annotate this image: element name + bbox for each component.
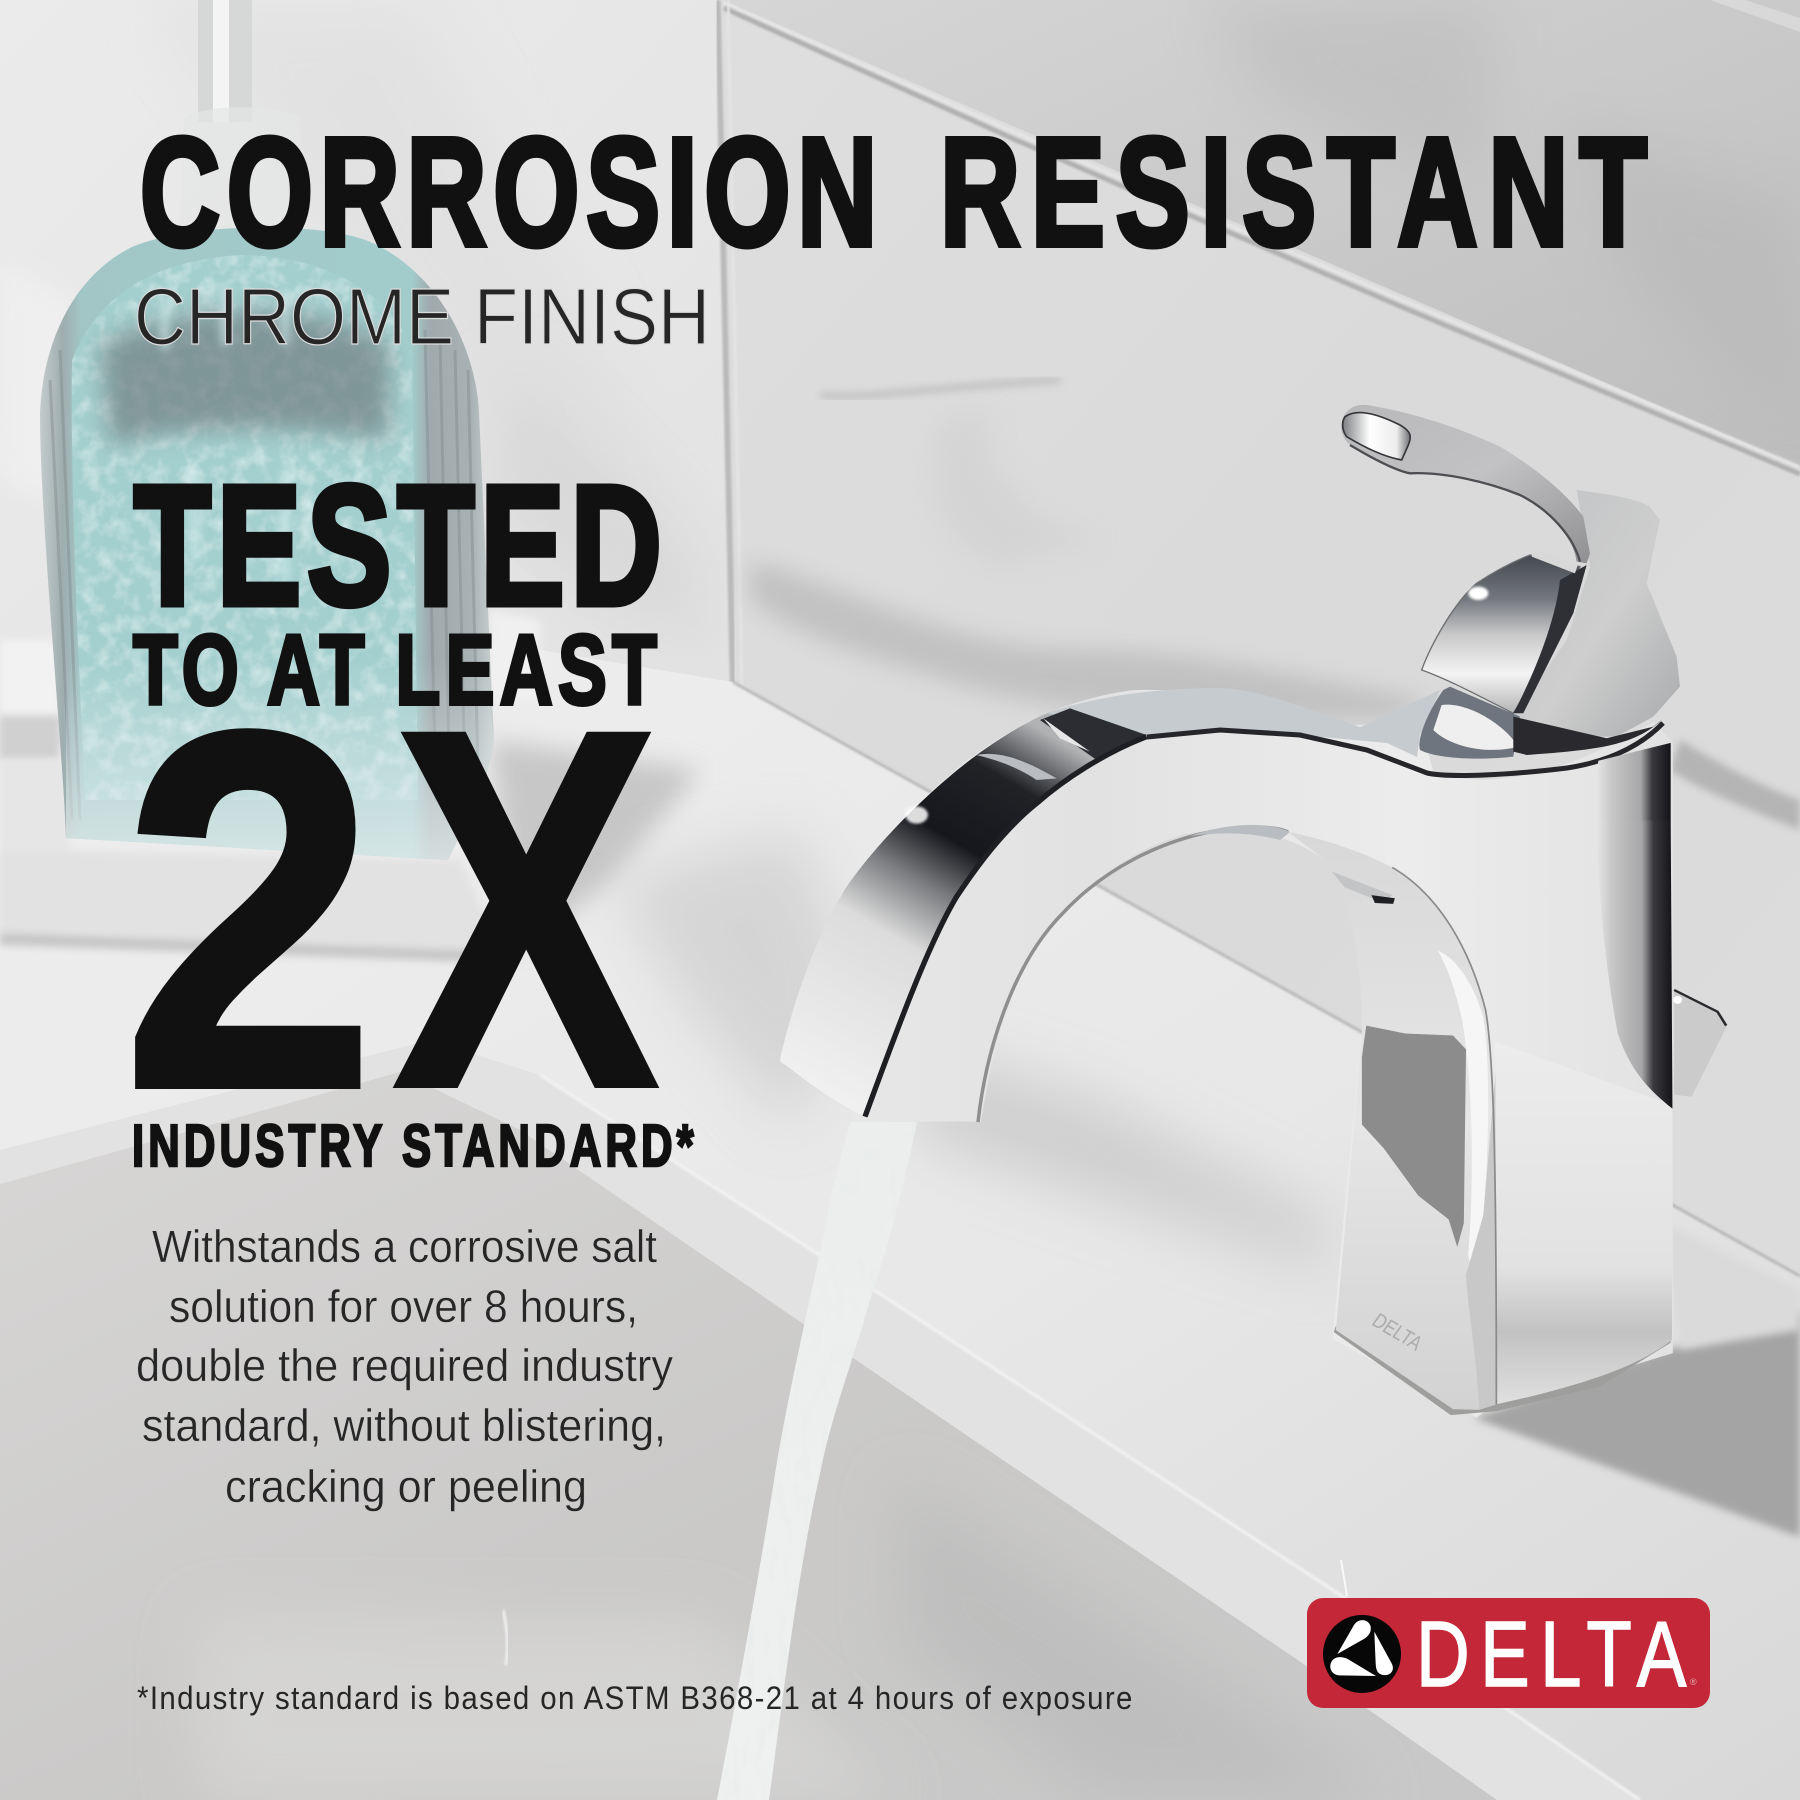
spout reflections bbox=[865, 708, 1147, 1117]
counter glint bbox=[1341, 1560, 1347, 1596]
counter edge band bbox=[0, 1040, 1640, 1800]
title: corrosion resistant: CORROSION bbox=[140, 107, 877, 278]
water stream bbox=[717, 1122, 917, 1800]
lower right block bbox=[1494, 1041, 1672, 1404]
headline: to at least: TO AT LEAST bbox=[133, 615, 657, 726]
soap dispenser bottle bbox=[40, 0, 494, 860]
drain lever bbox=[1674, 990, 1727, 1097]
arch lip bbox=[1190, 825, 1290, 840]
footnote: *Industry standard is based on ASTM B368-21 at 4 hours of exposure bbox=[137, 1680, 1132, 1716]
base trim bbox=[1334, 1326, 1671, 1415]
upper wall tile bbox=[722, 0, 1800, 467]
bottle glass bbox=[40, 227, 494, 860]
sparkle bbox=[1673, 996, 1682, 1004]
registered mark: ® bbox=[1690, 1677, 1697, 1687]
left wall tile bbox=[0, 0, 735, 780]
faucet top edge line bbox=[1147, 723, 1663, 775]
body copy: standard, without blistering, bbox=[142, 1400, 666, 1451]
logo icon: delta emblem bbox=[1323, 1615, 1401, 1693]
spout front facet bbox=[780, 688, 1220, 1117]
leg gray reflection bbox=[1362, 1026, 1466, 1247]
counter shadows bbox=[490, 740, 700, 950]
subtitle: chrome finish: CHROME FINISH bbox=[134, 272, 710, 361]
faucet leg and lower body bbox=[1288, 743, 1727, 1415]
box and tray behind bottle bbox=[0, 640, 60, 716]
marble veins bbox=[750, 560, 1430, 720]
faucet body bbox=[780, 690, 1673, 1418]
bottle dark band bbox=[100, 311, 390, 445]
sink basin bbox=[0, 1072, 1497, 1800]
countertop bbox=[0, 640, 1800, 1800]
chrome faucet bbox=[780, 405, 1727, 1418]
wall seam bbox=[733, 682, 1800, 1276]
headline: tested: TESTED bbox=[134, 451, 662, 640]
bottle liquid mottling bbox=[72, 255, 418, 800]
logo wordmark: DELTA bbox=[1416, 1602, 1686, 1706]
body copy: Withstands a corrosive salt bbox=[152, 1221, 657, 1272]
hub bbox=[1422, 555, 1580, 713]
right dark reflection bbox=[1596, 820, 1672, 1109]
dark trim under dome bbox=[1513, 717, 1662, 755]
dome bbox=[1513, 490, 1680, 737]
title: corrosion resistant: RESISTANT bbox=[940, 107, 1647, 278]
big number: 2X: X bbox=[392, 622, 662, 1195]
body copy: cracking or peeling bbox=[225, 1461, 587, 1512]
tile grout lines bbox=[722, 2, 1800, 467]
faucet handle assembly bbox=[1341, 405, 1680, 759]
neck bbox=[1419, 687, 1520, 759]
sink reflection bbox=[503, 1610, 507, 1665]
headline: industry standard: INDUSTRY STANDARD* bbox=[132, 1113, 694, 1179]
body copy bbox=[136, 1221, 673, 1512]
leg notch bbox=[1332, 871, 1392, 903]
bottle base haze bbox=[66, 660, 494, 860]
big number: 2X bbox=[122, 622, 662, 1195]
leg bright strip bbox=[1438, 950, 1488, 1275]
body copy: solution for over 8 hours, bbox=[169, 1281, 638, 1332]
spout top deck bbox=[1047, 688, 1440, 757]
leg side band bbox=[1466, 1073, 1495, 1410]
bottle ribs bbox=[50, 330, 478, 820]
leg bbox=[1288, 832, 1496, 1410]
body copy: double the required industry bbox=[136, 1340, 673, 1391]
main wall tile bbox=[722, 0, 1800, 1276]
engraved brand mark: DELTA bbox=[1368, 1308, 1428, 1355]
big number: 2X: 2 bbox=[122, 626, 376, 1194]
lever tip bbox=[1343, 413, 1410, 460]
bottle streaks bbox=[165, 285, 285, 580]
dispenser pump bbox=[180, 0, 304, 230]
arch edge bbox=[978, 827, 1288, 1122]
title: corrosion resistant bbox=[140, 107, 1647, 278]
Delta logo badge bbox=[1307, 1598, 1710, 1708]
lever bbox=[1341, 405, 1590, 563]
